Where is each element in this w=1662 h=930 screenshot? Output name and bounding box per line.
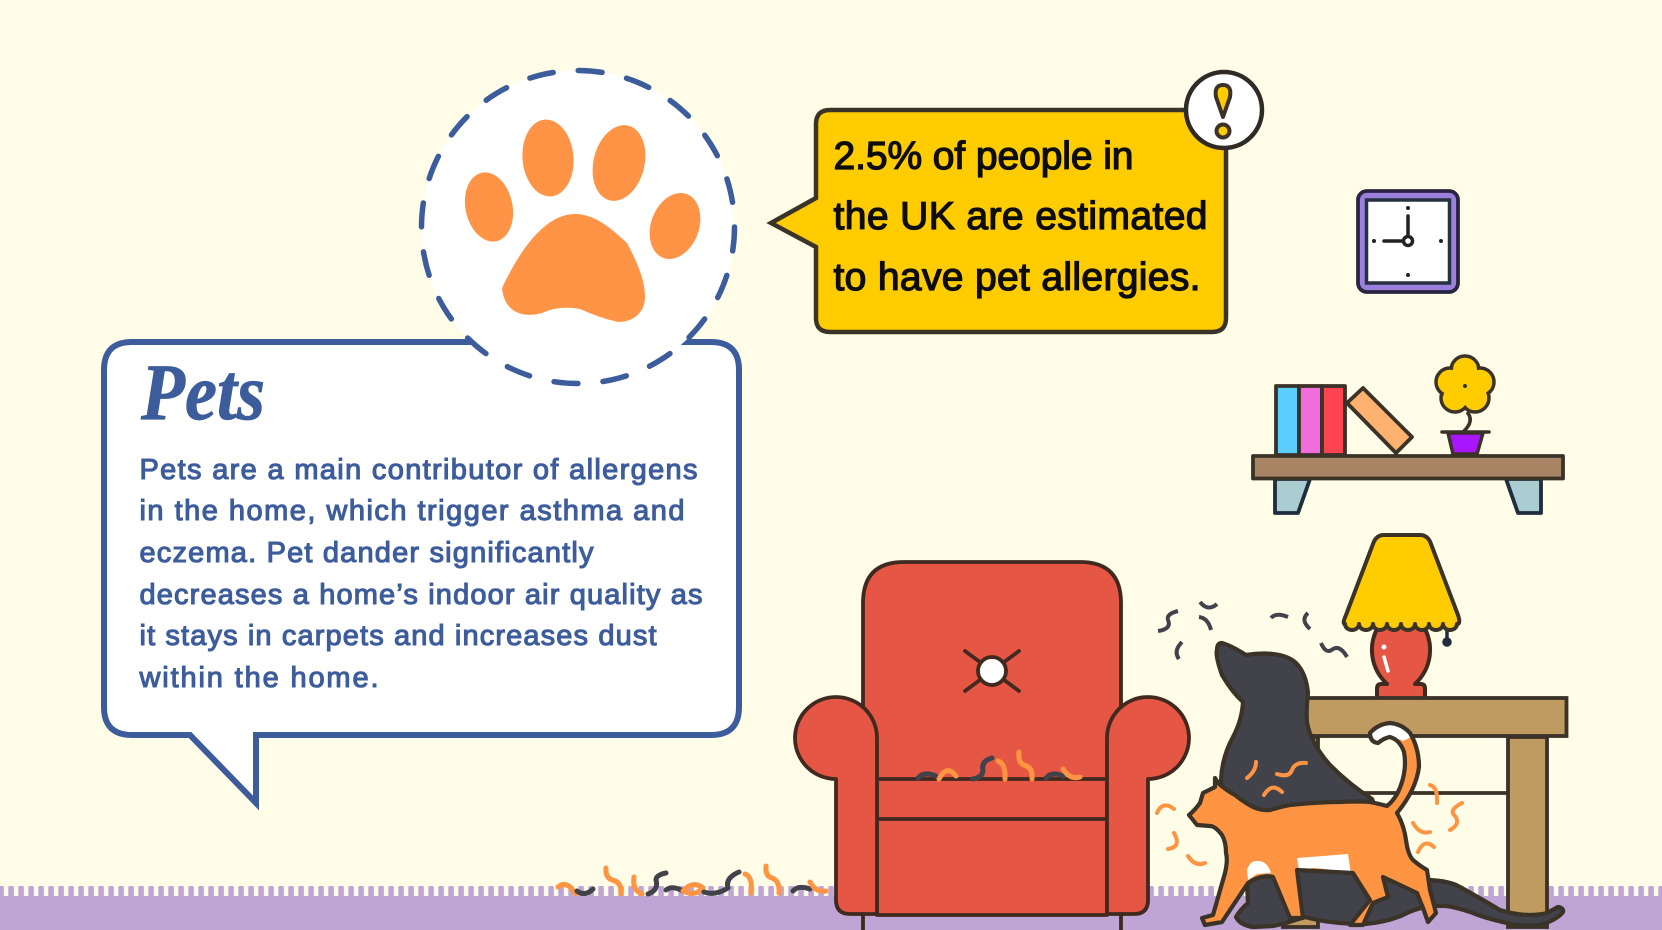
body text: in the home, which trigger asthma and	[140, 495, 684, 527]
icon: wall clock	[1358, 191, 1458, 292]
dog	[1217, 643, 1563, 927]
cat	[1189, 723, 1436, 925]
hair on floor	[558, 866, 826, 894]
hair on armchair	[918, 752, 1080, 779]
panel: Pets description speech bubble	[104, 342, 739, 803]
shelf brackets	[1275, 479, 1541, 513]
callout: pet allergy statistic: 2.5% of people in	[834, 135, 1134, 178]
chair button	[965, 651, 1019, 691]
shelf board	[1253, 456, 1563, 478]
body text	[138, 454, 702, 694]
shelf with books and plant	[1253, 356, 1563, 513]
icon: exclamation badge	[1186, 72, 1262, 148]
armchair	[795, 562, 1189, 930]
callout: pet allergy statistic	[771, 110, 1226, 332]
side table	[1283, 698, 1566, 927]
books	[1276, 386, 1412, 455]
heading: Pets: Pets	[140, 349, 265, 437]
cat hair flecks	[1157, 762, 1462, 864]
carpet	[0, 886, 1662, 930]
callout: pet allergy statistic: the UK are estimated	[834, 195, 1208, 238]
potted flower	[1436, 356, 1494, 454]
body text: within the home.	[138, 662, 378, 694]
body text: decreases a home’s indoor air quality as	[140, 579, 702, 611]
callout: pet allergy statistic: to have pet allergies.	[834, 256, 1200, 299]
icon: paw in dashed circle	[422, 70, 734, 384]
cat white patches	[1247, 723, 1411, 880]
body text: it stays in carpets and increases dust	[140, 620, 656, 652]
body text: Pets are a main contributor of allergens	[140, 454, 698, 486]
table lamp	[1344, 535, 1459, 699]
dog hair flecks	[1158, 602, 1347, 659]
body text: eczema. Pet dander significantly	[140, 537, 594, 569]
